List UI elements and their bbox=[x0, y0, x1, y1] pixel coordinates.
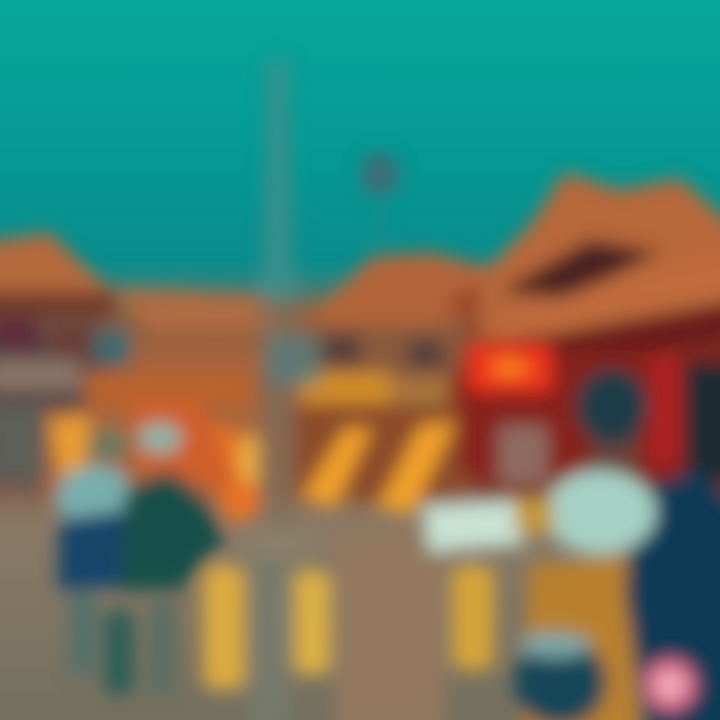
pole bbox=[238, 60, 320, 558]
glowing yellow archways bbox=[302, 422, 456, 514]
left building dark windows bbox=[0, 318, 131, 480]
glowing red lantern sign bbox=[468, 344, 552, 392]
right palace lower roof bbox=[490, 245, 720, 372]
building base layer bbox=[0, 295, 720, 510]
right palace upper roof bbox=[480, 172, 720, 340]
person figure right bbox=[422, 368, 720, 720]
cyclist figure left bbox=[57, 422, 225, 695]
glowing orange stalls left bbox=[45, 345, 265, 525]
wet road reflections bbox=[203, 530, 494, 720]
far left roof bbox=[0, 232, 125, 316]
central gate details bbox=[290, 325, 460, 500]
right palace red wall and columns bbox=[448, 352, 720, 485]
middle left roof bbox=[115, 288, 285, 332]
distant flag bbox=[362, 154, 398, 240]
central roof bbox=[305, 252, 540, 328]
